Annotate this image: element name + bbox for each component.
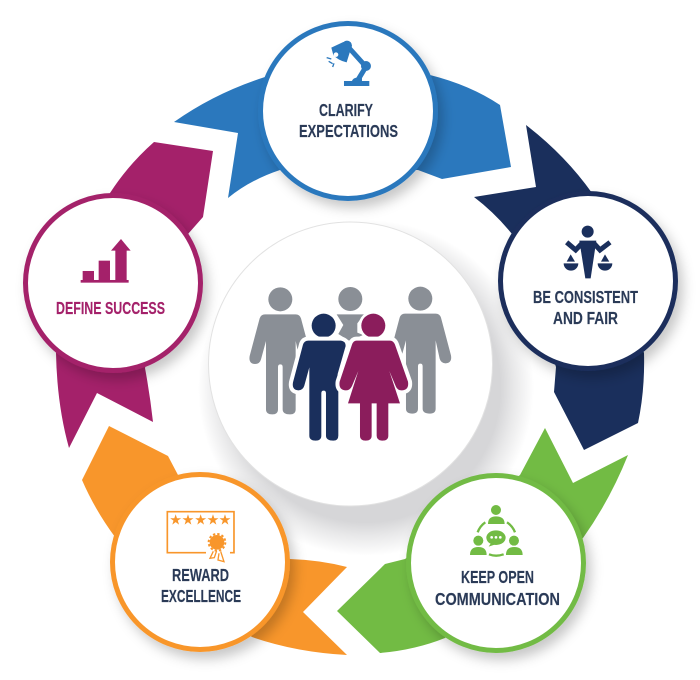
label: be consistent and fair <box>533 287 638 328</box>
label: clarify expectations: EXPECTATIONS <box>299 121 398 141</box>
navy ribbon <box>474 125 644 450</box>
icon: desk lamp <box>327 41 371 86</box>
panel: clarify expectations <box>174 24 511 198</box>
label: keep open communication: KEEP OPEN <box>461 567 534 587</box>
panel: be consistent and fair <box>474 125 676 450</box>
label: clarify expectations <box>299 100 398 141</box>
navy person <box>293 314 346 441</box>
magenta ribbon <box>56 142 213 448</box>
icon: group conversation <box>470 505 523 556</box>
hub shadow <box>198 220 534 556</box>
label: be consistent and fair: AND FAIR <box>553 308 618 328</box>
label: reward excellence: EXCELLENCE <box>161 586 241 606</box>
blue circle <box>260 24 436 198</box>
panel: central team <box>208 222 492 506</box>
icon: certificate with stars <box>167 512 234 562</box>
navy circle <box>500 194 676 368</box>
panel: reward excellence <box>82 426 347 655</box>
hub circle <box>208 222 492 506</box>
gray person middle <box>337 287 364 341</box>
label: keep open communication: COMMUNICATION <box>435 589 560 609</box>
label: keep open communication <box>435 567 560 609</box>
green ribbon <box>337 428 628 653</box>
orange ribbon <box>82 426 347 655</box>
gray person right <box>389 287 451 414</box>
panel: define success <box>26 142 213 448</box>
label: be consistent and fair: BE CONSISTENT <box>533 287 638 307</box>
magenta person <box>339 314 408 441</box>
panel: keep open communication <box>337 428 628 653</box>
icon: rising bar chart <box>81 239 131 283</box>
orange circle <box>112 474 288 650</box>
green circle <box>408 476 584 650</box>
icon: person with scales <box>564 226 612 278</box>
blue ribbon <box>174 75 511 198</box>
magenta circle <box>26 196 200 370</box>
icon: team of people <box>249 287 451 441</box>
label: clarify expectations: CLARIFY <box>319 100 373 120</box>
label: define success: DEFINE SUCCESS <box>56 298 165 318</box>
label: reward excellence <box>161 565 241 606</box>
gray person left <box>249 287 311 414</box>
label: reward excellence: REWARD <box>172 565 229 585</box>
